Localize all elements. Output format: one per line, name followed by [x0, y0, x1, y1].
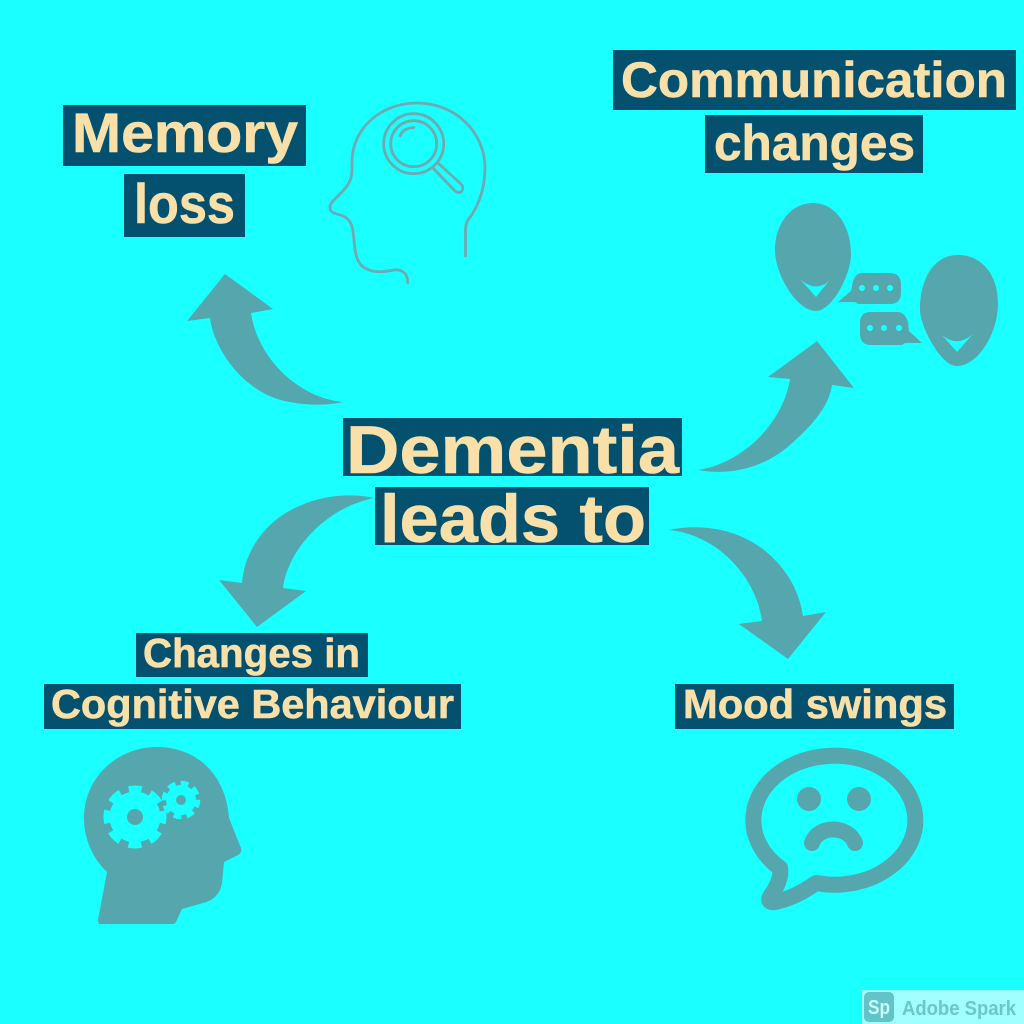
heading: Dementia leads to: Dementia	[346, 412, 680, 488]
icon: two faces talking	[775, 203, 998, 366]
heading: Memory loss: loss	[134, 172, 235, 235]
heading: Communication changes	[613, 50, 1016, 173]
badge: Adobe Spark watermark: Sp	[868, 997, 890, 1019]
gear large	[107, 789, 163, 845]
arrow: to Mood swings	[669, 527, 826, 659]
heading: Changes in Cognitive Behaviour: Changes in	[143, 630, 360, 676]
face right	[920, 255, 998, 366]
badge: Adobe Spark watermark: Adobe Spark	[902, 998, 1017, 1020]
arrow: to Changes in Cognitive Behaviour	[219, 495, 374, 627]
speech bubble upper	[838, 273, 901, 304]
heading: Memory loss: Memory	[72, 101, 298, 164]
badge: Adobe Spark watermark	[862, 990, 1024, 1024]
heading: Changes in Cognitive Behaviour	[44, 630, 461, 729]
speech bubble lower	[860, 312, 922, 345]
heading: Communication changes: changes	[714, 115, 915, 171]
heading: Dementia leads to: leads to	[380, 481, 646, 557]
heading: Mood swings: Mood swings	[683, 681, 947, 727]
icon: head outline with magnifier	[330, 103, 485, 283]
icon: sad face speech bubble	[753, 756, 915, 902]
heading: Changes in Cognitive Behaviour: Cognitive Behaviour	[51, 681, 454, 727]
heading: Memory loss	[63, 101, 306, 237]
heading: Dementia leads to	[343, 412, 682, 557]
arrow: to Memory loss	[187, 274, 343, 405]
gear small	[161, 780, 201, 820]
icon: head with gears	[84, 747, 241, 924]
heading: Communication changes: Communication	[621, 52, 1007, 108]
arrow: to Communication changes	[698, 341, 854, 472]
face left	[775, 203, 851, 311]
